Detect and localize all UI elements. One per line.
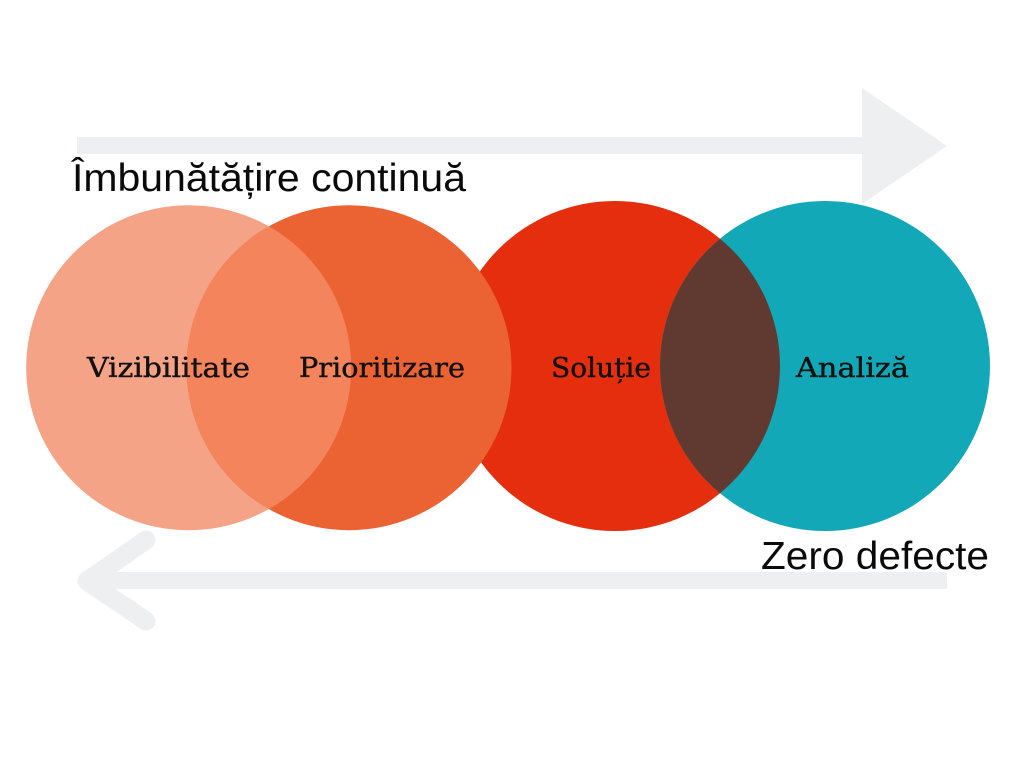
arrow: bottom, pointing left [87, 540, 947, 621]
label: Soluție: Soluție [551, 353, 651, 384]
circle: Vizibilitate [26, 205, 351, 530]
heading: zero defects: Zero defecte [761, 535, 989, 578]
circle: Soluție [450, 201, 780, 531]
arrow: top, pointing right [77, 88, 947, 204]
overlap: Vizibilitate and Prioritizare [186, 226, 352, 509]
circle: Prioritizare [186, 205, 512, 530]
label: Analiză: Analiză [795, 353, 909, 384]
heading: continuous improvement: Îmbunătățire continuă [71, 157, 466, 200]
overlap: Soluție and Analiză [660, 238, 780, 494]
label: Prioritizare: Prioritizare [299, 353, 465, 384]
circle: Analiză [660, 201, 990, 531]
label: Vizibilitate: Vizibilitate [86, 353, 250, 384]
